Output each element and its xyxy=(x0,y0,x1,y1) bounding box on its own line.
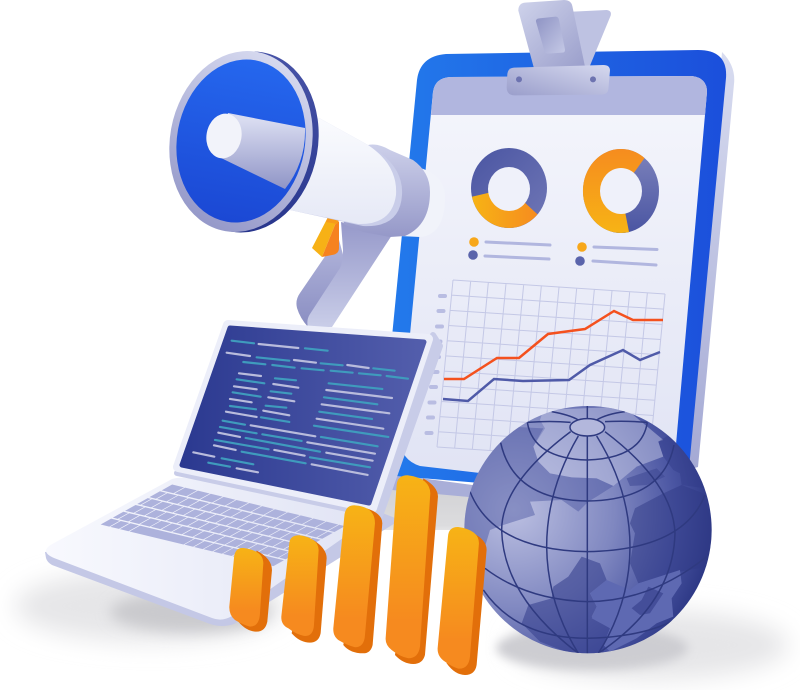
megaphone bell light rim xyxy=(155,40,327,243)
legend: right donut xyxy=(575,242,657,266)
code lines on screen xyxy=(193,341,408,475)
purple trend line xyxy=(443,350,660,401)
panel: clipboard xyxy=(380,0,734,500)
line chart xyxy=(426,280,665,461)
megaphone rear cap xyxy=(400,168,445,237)
megaphone bell blue face xyxy=(164,49,318,233)
laptop base deck xyxy=(46,478,380,620)
laptop lid back edge xyxy=(177,335,440,516)
orange trend line xyxy=(444,311,663,379)
chart axis ticks xyxy=(426,296,445,433)
bar 5 xyxy=(438,527,487,675)
clipboard side edge xyxy=(688,52,734,470)
donut chart: right xyxy=(583,149,659,233)
clipboard blue board xyxy=(380,50,726,500)
bar 2 xyxy=(281,535,327,643)
icon: megaphone xyxy=(155,40,445,327)
megaphone horn body xyxy=(290,118,402,226)
icon: laptop xyxy=(45,325,440,626)
laptop screen bezel xyxy=(178,325,428,508)
globe meridians and parallels xyxy=(470,406,707,653)
megaphone handle xyxy=(296,222,392,327)
legend: left donut xyxy=(468,237,550,260)
ground shadows xyxy=(15,480,788,680)
bar chart: orange bars xyxy=(229,475,487,675)
clipboard paper header xyxy=(431,76,707,115)
clipboard clip xyxy=(507,0,611,95)
globe sphere xyxy=(464,406,712,653)
megaphone tube cap xyxy=(203,111,245,161)
donut chart: left xyxy=(471,148,547,228)
bar 4 xyxy=(386,475,438,664)
laptop base edge xyxy=(45,512,400,626)
clipboard paper sheet xyxy=(400,76,707,490)
megaphone inner tube xyxy=(219,113,305,189)
globe polar cap xyxy=(570,419,605,436)
laptop screen xyxy=(182,328,424,503)
bar 1 xyxy=(229,548,272,632)
megaphone trigger xyxy=(312,217,339,257)
bar 3 xyxy=(333,505,382,653)
icon: globe xyxy=(460,406,717,657)
globe continents xyxy=(460,407,717,657)
clipboard lower edge xyxy=(390,474,480,498)
megaphone collar xyxy=(343,145,430,237)
chart grid xyxy=(437,280,665,461)
megaphone bell dark rim xyxy=(161,40,333,244)
laptop keyboard xyxy=(106,487,340,563)
